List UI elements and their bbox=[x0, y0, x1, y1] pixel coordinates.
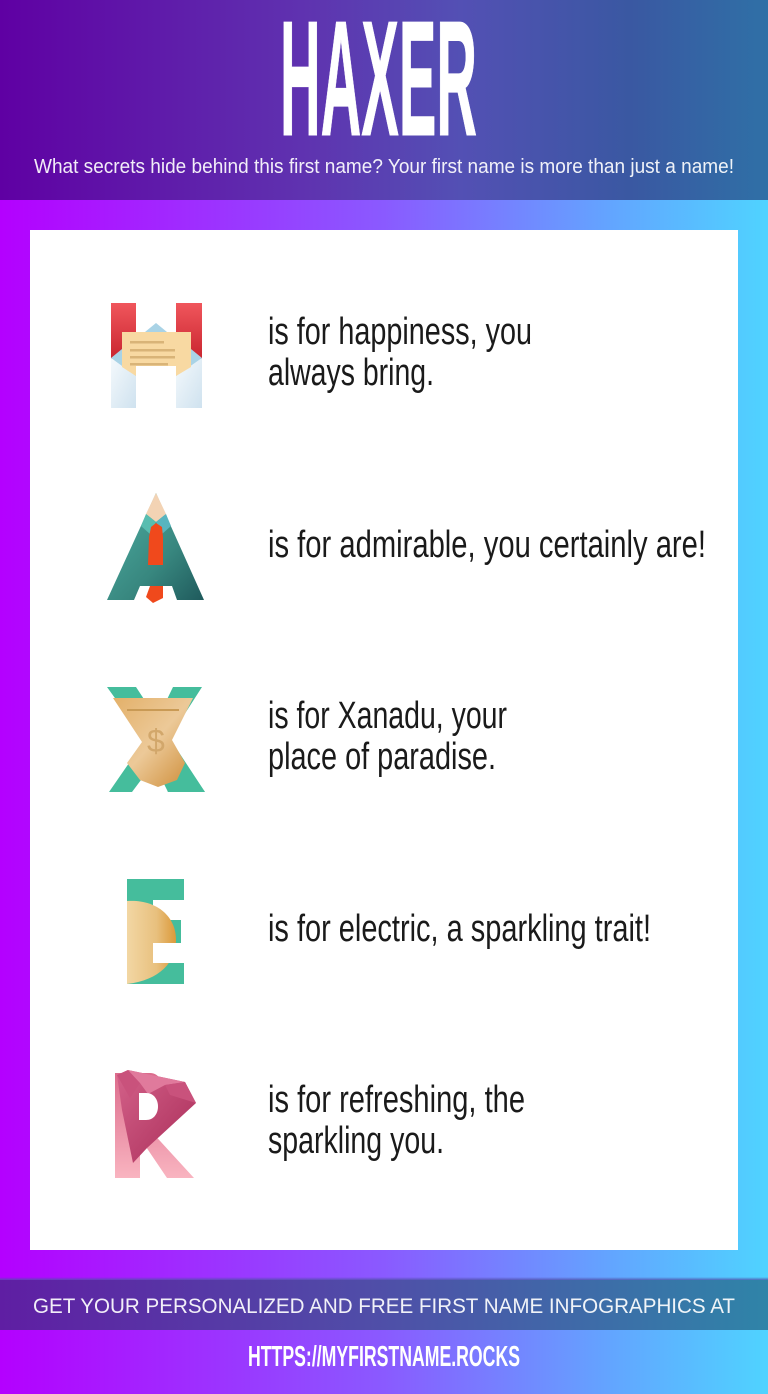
text: R line: is for refreshing, the bbox=[268, 1079, 525, 1121]
icon: letter X medal bbox=[107, 687, 205, 792]
white content panel bbox=[30, 230, 738, 1250]
footer band bbox=[0, 1277, 768, 1330]
icon: letter H envelope bbox=[111, 303, 202, 408]
text: R line bbox=[268, 1079, 525, 1162]
subtitle: What secrets hide behind this first name? Your first name is more than just a name! bbox=[34, 156, 734, 178]
text: E line: is for electric, a sparkling trait! bbox=[268, 908, 651, 950]
icon: letter A suit and tie bbox=[107, 493, 204, 603]
text: R line: sparkling you. bbox=[268, 1120, 444, 1162]
text: H line bbox=[268, 311, 532, 394]
footer call to action: GET YOUR PERSONALIZED AND FREE FIRST NAME INFOGRAPHICS AT bbox=[33, 1295, 735, 1318]
icon: letter R diamond bbox=[115, 1070, 196, 1178]
text: X line: is for Xanadu, your bbox=[268, 695, 507, 737]
text: X line: place of paradise. bbox=[268, 736, 496, 778]
icon: letter E coin bbox=[127, 879, 184, 984]
text: H line: is for happiness, you bbox=[268, 311, 532, 353]
text: X line bbox=[268, 695, 507, 778]
text: H line: always bring. bbox=[268, 352, 434, 394]
header band bbox=[0, 0, 768, 200]
footer url: HTTPS://MYFIRSTNAME.ROCKS bbox=[248, 1341, 520, 1373]
icon: letter X medal: $ bbox=[147, 723, 165, 759]
